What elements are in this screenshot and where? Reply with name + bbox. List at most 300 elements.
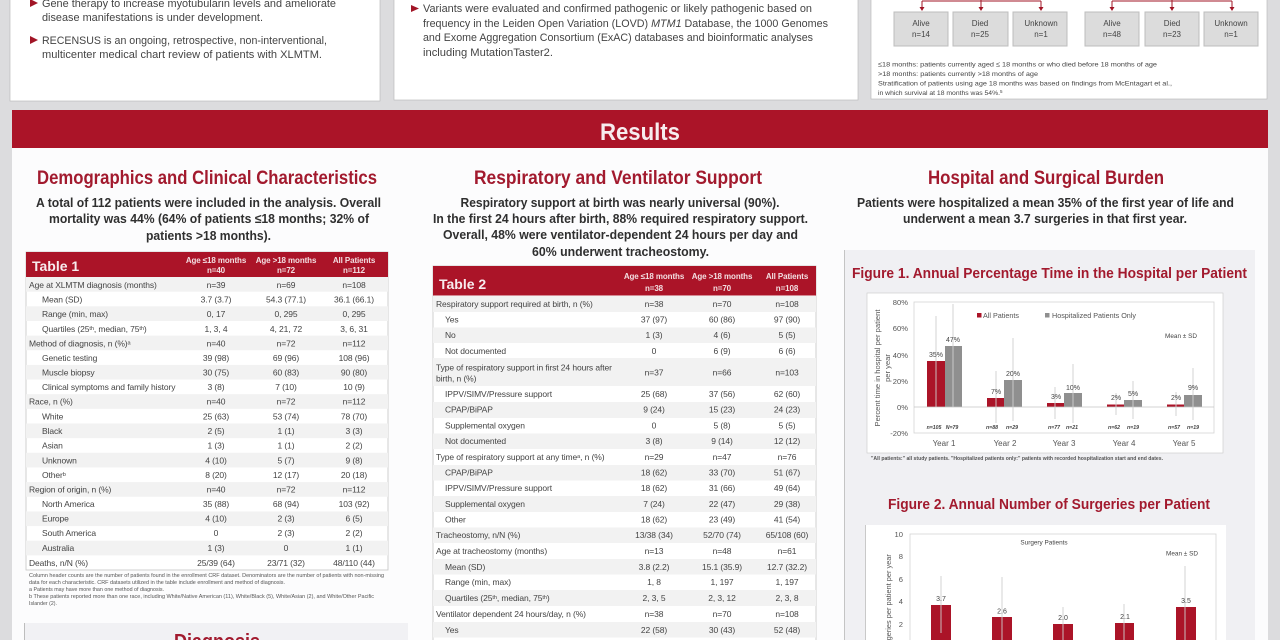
table 1 rows: 2 (2) — [346, 441, 363, 451]
outcome boxes — [894, 12, 1258, 46]
table 2 rows: 97 (90) — [774, 314, 800, 324]
table 1 rows: n=69 — [277, 280, 296, 290]
table 2 rows: Type of respiratory support in first 24 hours after — [436, 362, 612, 372]
table 1 footnotes: data for each characteristic. CRF datasets utilized in the table include enrollment and method of diagnosis. — [29, 580, 285, 586]
data labels: 10% — [1066, 385, 1080, 392]
table 1 header: n=112 — [343, 266, 366, 275]
outcome boxes: n=14 — [912, 30, 931, 39]
table 2 rows: n=108 — [775, 299, 799, 309]
table 1 rows: South America — [42, 528, 96, 538]
table 2 rows: 9 (14) — [711, 436, 733, 446]
table 2 rows: Yes — [445, 625, 459, 635]
table 2 rows: birth, n (%) — [436, 374, 477, 384]
table 1 rows: Method of diagnosis, n (%) — [29, 339, 128, 349]
stratification notes: in which survival at 18 months was 54%. — [878, 90, 1000, 97]
table 1 rows: Clinical symptoms and family history — [42, 382, 176, 392]
bullet: RECENSUS — [30, 35, 327, 61]
y axis: Percent time in hospital per patient — [873, 309, 882, 426]
table 1 rows: 54.3 (77.1) — [266, 295, 306, 305]
table 1 footnotes: a Patients may have more than one method of diagnosis. — [29, 587, 164, 593]
table 1 rows: n=40 — [207, 397, 226, 407]
bullet: variants: including MutationTaster2. — [423, 47, 553, 59]
table 1 — [26, 252, 388, 570]
table 2 header: All Patients — [766, 272, 809, 281]
table 1 rows: n=72 — [277, 397, 296, 407]
table 1 rows: 12 (17) — [273, 470, 299, 480]
table 2 rows: , n (%) — [580, 452, 605, 462]
table 1 rows: n=112 — [343, 339, 366, 349]
stratification notes: 5 — [1000, 89, 1003, 94]
table 1 rows: 23/71 (32) — [267, 558, 305, 568]
table 2 rows: 12 (12) — [774, 436, 800, 446]
y axis: 80% — [893, 298, 908, 307]
table 2 rows: 6 (6) — [779, 346, 796, 356]
table 2 rows: 41 (54) — [774, 515, 800, 525]
table 1 header: Table 1 — [32, 258, 79, 274]
summary: respiratory — [433, 195, 808, 259]
y axis: 40% — [893, 351, 908, 360]
table 2 rows: 22 (47) — [709, 499, 735, 509]
data labels: 3% — [1051, 394, 1061, 401]
arrows: right group — [1110, 0, 1234, 11]
table 2 rows: 18 (62) — [641, 515, 667, 525]
table 2 rows: 37 (97) — [641, 314, 667, 324]
summary: hospital — [857, 195, 1234, 226]
table 1 header: All Patients — [333, 256, 376, 265]
year labels: Year 1 — [933, 439, 956, 448]
table 2 rows: 52/70 (74) — [703, 530, 741, 540]
table 2 rows: 30 (43) — [709, 625, 735, 635]
figure 1 title: Figure 1. Annual Percentage Time in the Hospital per Patient — [852, 266, 1247, 282]
table 1 rows: 4 (10) — [205, 514, 227, 524]
outcome boxes: Unknown — [1214, 19, 1248, 28]
table 1 rows: n=72 — [277, 485, 296, 495]
table 1 rows: 0, 17 — [207, 309, 226, 319]
data labels: 47% — [946, 337, 960, 344]
table 2 rows: Not documented — [445, 346, 506, 356]
table 2 rows: n=13 — [645, 546, 664, 556]
table 1 rows: 4, 21, 72 — [270, 324, 302, 334]
table 2 header: n=108 — [776, 284, 799, 293]
table 1 rows: 35 (88) — [203, 499, 229, 509]
table 1 header — [26, 252, 388, 277]
table 1 rows: 5 (7) — [278, 455, 295, 465]
table 2 rows: 25 (68) — [641, 389, 667, 399]
table 1 rows: 68 (94) — [273, 499, 299, 509]
table 1 rows: Deaths, n/N (%) — [29, 558, 88, 568]
table 1 rows: Unknown — [42, 455, 77, 465]
table 1 rows: n=112 — [343, 397, 366, 407]
n labels: n=105 — [927, 425, 942, 431]
table 2 rows: 2, 3, 8 — [776, 593, 799, 603]
table 2 rows: th — [542, 595, 547, 601]
y axis: 20% — [893, 377, 908, 386]
table 1 header: Age >18 months — [256, 256, 317, 265]
bullet: gene therapy — [30, 0, 336, 24]
table 1 rows: 108 (96) — [339, 353, 370, 363]
table 1 rows: 7 (10) — [275, 382, 297, 392]
year labels: Year 4 — [1113, 439, 1136, 448]
bullet: variants: and Exome Aggregation Consortium (ExAC) databases and bioinformatic analyses — [423, 32, 813, 44]
year labels: Year 5 — [1173, 439, 1196, 448]
table 1 rows: 0 — [214, 528, 219, 538]
table 2 rows: 62 (60) — [774, 389, 800, 399]
table 1 rows: 1, 3, 4 — [205, 324, 228, 334]
stratification notes: >18 months: patients currently >18 months of age — [878, 71, 1038, 78]
panel: diagnosis — [24, 623, 408, 640]
y axis: 2 — [899, 620, 903, 629]
y axis — [884, 530, 903, 640]
table 2 rows: 2, 3, 5 — [643, 593, 666, 603]
table 2 header: Age ≤18 months — [624, 272, 685, 281]
table 1 rows: Race, n (%) — [29, 397, 73, 407]
table 1 rows: Black — [42, 426, 63, 436]
data labels: 3.5 — [1181, 598, 1191, 605]
table 2 rows: 0 — [652, 346, 657, 356]
table 2 rows: n=70 — [713, 609, 732, 619]
table 1 rows: 0, 295 — [342, 309, 366, 319]
bullet: gene therapy: disease manifestations is under development. — [42, 12, 263, 24]
year labels: Year 2 — [994, 439, 1017, 448]
data labels — [929, 337, 1198, 402]
data labels: 5% — [1128, 391, 1138, 398]
y axis: 4 — [899, 597, 903, 606]
y axis: per year — [883, 354, 892, 382]
table 1 footnotes: Islander (2). — [29, 601, 57, 607]
n labels: n=57 — [1168, 425, 1181, 431]
legend: Hospitalized Patients Only — [1052, 311, 1136, 320]
table 2 rows: 15 (23) — [709, 405, 735, 415]
table 1 rows: 39 (98) — [203, 353, 229, 363]
table 2 rows — [436, 299, 808, 635]
mean sd note: Mean ± SD — [1165, 333, 1197, 340]
data labels: 2% — [1111, 395, 1121, 402]
table 1 rows: 69 (96) — [273, 353, 299, 363]
n labels: n=19 — [1187, 425, 1199, 431]
table 2 rows: 6 (9) — [714, 346, 731, 356]
table 2 rows: 49 (64) — [774, 483, 800, 493]
table 2 rows: a — [577, 454, 581, 460]
outcome boxes: n=1 — [1224, 30, 1238, 39]
n labels: n=29 — [1006, 425, 1018, 431]
heading: demographics: Demographics and Clinical Characteristics — [37, 168, 377, 189]
outcome boxes: Died — [972, 19, 988, 28]
table 1 rows: Asian — [42, 441, 63, 451]
table 1 rows: North America — [42, 499, 95, 509]
table 2 rows: 3 (8) — [646, 436, 663, 446]
table 2 row stripes — [433, 296, 816, 638]
summary: hospital: underwent a mean 3.7 surgeries in that first year. — [903, 211, 1187, 226]
n labels: n=21 — [1066, 425, 1078, 431]
table 1 rows: 3 (8) — [208, 382, 225, 392]
table 2 rows: n=108 — [775, 609, 799, 619]
table 2 rows: 18 (62) — [641, 468, 667, 478]
table 2 rows: IPPV/SIMV/Pressure support — [445, 483, 553, 493]
table 2 rows: Age at tracheostomy (months) — [436, 546, 547, 556]
figure 2 chart — [865, 525, 1226, 640]
table 1 rows: 1 (1) — [346, 543, 363, 553]
table 1 rows: Range (min, max) — [42, 309, 108, 319]
table 1 rows: n=108 — [342, 280, 366, 290]
heading: respiratory: Respiratory and Ventilator Support — [474, 168, 763, 189]
table 2 rows: 9 (24) — [643, 405, 665, 415]
table 2 rows: Other — [445, 515, 466, 525]
table 1 rows: 9 (8) — [346, 455, 363, 465]
table 2 rows: n=48 — [713, 546, 732, 556]
table 2 rows: 1 (3) — [646, 330, 663, 340]
y axis — [873, 298, 908, 438]
data labels: 20% — [1006, 371, 1020, 378]
table 1 header: Age ≤18 months — [186, 256, 247, 265]
figure 1 chart — [867, 293, 1223, 453]
table 1 rows: 103 (92) — [339, 499, 370, 509]
table 1 rows: 2 (3) — [278, 528, 295, 538]
bars — [931, 605, 1196, 640]
table 1 rows: 48/110 (44) — [333, 558, 375, 568]
data labels: 7% — [991, 389, 1001, 396]
summary: respiratory: In the first 24 hours after birth, 88% required respiratory support. — [433, 211, 808, 226]
error bars — [941, 566, 1185, 640]
table 2 rows: Yes — [445, 314, 459, 324]
table 1 rows: 1 (1) — [278, 441, 295, 451]
table 1 rows: Mean (SD) — [42, 295, 82, 305]
table 1 rows: b — [63, 472, 66, 478]
panel: methods — [394, 0, 858, 100]
table 1 rows: 2 (2) — [346, 528, 363, 538]
table 1 rows: 53 (74) — [273, 412, 299, 422]
table 2 rows: n=37 — [645, 368, 664, 378]
table 2 rows: 3.8 (2.2) — [639, 562, 670, 572]
bullet: variants: frequency in the Leiden Open Variation (LOVD) MTM1 Database, the 1000 Genomes — [423, 18, 828, 30]
table 1 rows: 1 (3) — [208, 543, 225, 553]
table 1 rows: 90 (80) — [341, 368, 367, 378]
table 2 rows: IPPV/SIMV/Pressure support — [445, 389, 553, 399]
outcome boxes: n=48 — [1103, 30, 1122, 39]
heading: hospital: Hospital and Surgical Burden — [928, 168, 1164, 189]
y axis: 0% — [897, 403, 908, 412]
table 2 rows: , median, 75 — [497, 593, 543, 603]
table 1 rows: Other — [42, 470, 63, 480]
data labels: 3.7 — [936, 596, 946, 603]
y axis: 10 — [895, 530, 903, 539]
error bars — [936, 304, 1193, 423]
table 1 rows: Age at XLMTM diagnosis (months) — [29, 280, 157, 290]
bullet: RECENSUS: RECENSUS is an ongoing, retrospective, non-interventional, — [42, 35, 327, 47]
outcome boxes: Alive — [1103, 19, 1121, 28]
table 2 rows: 0 — [652, 421, 657, 431]
table 2 rows: 7 (24) — [643, 499, 665, 509]
data labels: 2.0 — [1058, 615, 1068, 622]
summary: hospital: Patients were hospitalized a mean 35% of the first year of life and — [857, 195, 1234, 210]
table 1 rows: Quartiles (25 — [42, 324, 89, 334]
table 2 rows: n=47 — [713, 452, 732, 462]
table 2 rows: Type of respiratory support at any time — [436, 452, 577, 462]
table 1 rows: Genetic testing — [42, 353, 98, 363]
table 1 rows: a — [128, 341, 132, 347]
table 1 rows: th — [89, 326, 94, 332]
summary: demographics: patients >18 months). — [146, 228, 271, 243]
bullet: variants — [411, 3, 828, 59]
table 2 header: Table 2 — [439, 276, 486, 292]
table 1 rows: , median, 75 — [94, 324, 140, 334]
table 2 — [433, 266, 816, 640]
n labels — [927, 425, 1199, 431]
table 1 rows: ) — [144, 324, 147, 334]
table 2 rows: 4 (6) — [714, 330, 731, 340]
table 2 rows: Quartiles (25 — [445, 593, 492, 603]
results banner: Results — [600, 119, 680, 146]
table 1 header: n=40 — [207, 266, 226, 275]
table 2 rows: Ventilator dependent 24 hours/day, n (%) — [436, 609, 586, 619]
outcome boxes: n=25 — [971, 30, 990, 39]
chart notes: Mean ± SD — [1166, 550, 1198, 558]
table 2 rows: 5 (8) — [714, 421, 731, 431]
data labels — [936, 596, 1191, 622]
table 2 rows: Tracheostomy, n/N (%) — [436, 530, 521, 540]
table 2 rows: n=103 — [775, 368, 799, 378]
year labels — [933, 439, 1196, 448]
summary: demographics: A total of 112 patients were included in the analysis. Overall — [36, 195, 381, 210]
data labels: 2% — [1171, 395, 1181, 402]
summary: respiratory: Respiratory support at birth was nearly universal (90%). — [460, 195, 780, 210]
table 1 rows: 60 (83) — [273, 368, 299, 378]
summary: respiratory: Overall, 48% were ventilator-dependent 24 hours per day and — [443, 227, 798, 242]
legend — [977, 311, 1136, 320]
table 2 rows: 1, 197 — [775, 577, 799, 587]
data labels: 9% — [1188, 385, 1198, 392]
table 1 rows: 1 (3) — [208, 441, 225, 451]
table 1 rows — [29, 280, 375, 568]
table 1 rows: 78 (70) — [341, 412, 367, 422]
table 2 header: n=38 — [645, 284, 664, 293]
table 2 header — [433, 266, 816, 296]
table 1 rows: n=40 — [207, 485, 226, 495]
table 1 rows: n=112 — [343, 485, 366, 495]
table 2 rows: Respiratory support required at birth, n (%) — [436, 299, 593, 309]
legend: All Patients — [983, 311, 1019, 320]
stratification notes — [878, 62, 1172, 97]
panel: introduction — [10, 0, 380, 101]
table 2 rows: 60 (86) — [709, 314, 735, 324]
n labels: N=79 — [946, 425, 958, 431]
figure 1 caption: "All patients:" all study patients. "Hospitalized patients only:" patients with recorded hospitalization start and end dates. — [871, 456, 1163, 462]
panel: figures — [844, 250, 1255, 640]
y axis: 6 — [899, 575, 903, 584]
table 2 rows: ) — [547, 593, 550, 603]
table 2 rows: 5 (5) — [779, 421, 796, 431]
table 1 rows: 1 (1) — [278, 426, 295, 436]
table 2 rows: th — [492, 595, 497, 601]
table 2 rows: Supplemental oxygen — [445, 421, 525, 431]
table 2 rows: n=66 — [713, 368, 732, 378]
table 1 rows: 3.7 (3.7) — [201, 295, 232, 305]
table 2 rows: CPAP/BiPAP — [445, 405, 493, 415]
table 1 footnotes — [29, 573, 384, 607]
outcome boxes: Unknown — [1024, 19, 1058, 28]
table 1 rows: 0 — [284, 543, 289, 553]
table 2 rows: n=38 — [645, 299, 664, 309]
table 2 rows: 51 (67) — [774, 468, 800, 478]
n labels: n=77 — [1048, 425, 1061, 431]
data labels: 35% — [929, 352, 943, 359]
summary: respiratory: 60% underwent tracheostomy. — [532, 244, 709, 259]
table 2 rows: n=61 — [778, 546, 797, 556]
table 2 rows: 33 (70) — [709, 468, 735, 478]
table 2 rows: 52 (48) — [774, 625, 800, 635]
table 2 rows: 65/108 (60) — [766, 530, 808, 540]
table 2 rows: 13/38 (34) — [635, 530, 673, 540]
data labels: 2.6 — [997, 608, 1007, 616]
table 1 rows: 2 (5) — [208, 426, 225, 436]
year labels: Year 3 — [1053, 439, 1076, 448]
table 1 rows: Region of origin, n (%) — [29, 485, 112, 495]
table 2 rows: 22 (58) — [641, 625, 667, 635]
table 2 rows: 29 (38) — [774, 499, 800, 509]
table 2 rows: 37 (56) — [709, 389, 735, 399]
table 2 rows: 23 (49) — [709, 515, 735, 525]
outcome boxes: n=23 — [1163, 30, 1182, 39]
chart notes: Surgery Patients — [1020, 540, 1068, 546]
table 2 rows: 15.1 (35.9) — [702, 562, 742, 572]
table 1 rows: 3, 6, 31 — [340, 324, 368, 334]
table 1 rows: 6 (5) — [346, 514, 363, 524]
table 2 rows: Range (min, max) — [445, 577, 511, 587]
table 1 header: n=72 — [277, 266, 296, 275]
outcome boxes: n=1 — [1034, 30, 1048, 39]
summary: demographics: mortality was 44% (64% of patients ≤18 months; 32% of — [49, 211, 370, 226]
table 1 rows: 20 (18) — [341, 470, 367, 480]
stratification notes: Stratification of patients using age 18 months was based on findings from McEntagart et al., — [878, 80, 1172, 88]
table 2 rows: n=76 — [778, 452, 797, 462]
bullet: RECENSUS: multicenter medical chart review of patients with XLMTM. — [42, 49, 322, 61]
figure 2 title: Figure 2. Annual Number of Surgeries per Patient — [888, 497, 1210, 513]
table 1 rows: n=39 — [207, 280, 226, 290]
table 1 rows: 0, 295 — [274, 309, 298, 319]
table 1 rows: White — [42, 412, 64, 422]
table 2 rows: 5 (5) — [779, 330, 796, 340]
n labels: n=62 — [1108, 425, 1120, 431]
table 1 footnotes: b These patients reported more than one race, including White/Native American (11), White/Black (5), White/Asian (2), and White/Other Pacific — [29, 594, 374, 600]
table 2 rows: 31 (66) — [709, 483, 735, 493]
arrows: left group — [920, 0, 1044, 11]
table 2 rows: 18 (62) — [641, 483, 667, 493]
table 1 footnotes: Column header counts are the number of patients found in the enrollment CRF dataset. Denominators are the number of patients with non-missing — [29, 573, 384, 579]
y axis: 8 — [899, 552, 903, 561]
chart notes — [1020, 540, 1198, 558]
table 1 rows: Australia — [42, 543, 75, 553]
table 1 rows: n=72 — [277, 339, 296, 349]
table 1 rows: 30 (75) — [203, 368, 229, 378]
results banner — [12, 110, 1268, 148]
panel: patient stratification flow — [871, 0, 1267, 99]
table 1 rows: n=40 — [207, 339, 226, 349]
table 1 rows: 10 (9) — [343, 382, 365, 392]
table 2 rows: Mean (SD) — [445, 562, 485, 572]
table 1 rows: 2 (3) — [278, 514, 295, 524]
table 1 rows: th — [139, 326, 144, 332]
table 1 rows: 4 (10) — [205, 455, 227, 465]
table 2 rows: 2, 3, 12 — [708, 593, 736, 603]
table 2 rows: n=38 — [645, 609, 664, 619]
table 1 rows: 25 (63) — [203, 412, 229, 422]
data labels: 2.1 — [1120, 614, 1130, 621]
table 2 header: n=70 — [713, 284, 732, 293]
table 2 rows: 1, 197 — [710, 577, 734, 587]
table 1 row stripes — [26, 277, 388, 555]
table 2 rows: 24 (23) — [774, 405, 800, 415]
n labels: n=88 — [986, 425, 998, 431]
table 2 rows: 1, 8 — [647, 577, 661, 587]
